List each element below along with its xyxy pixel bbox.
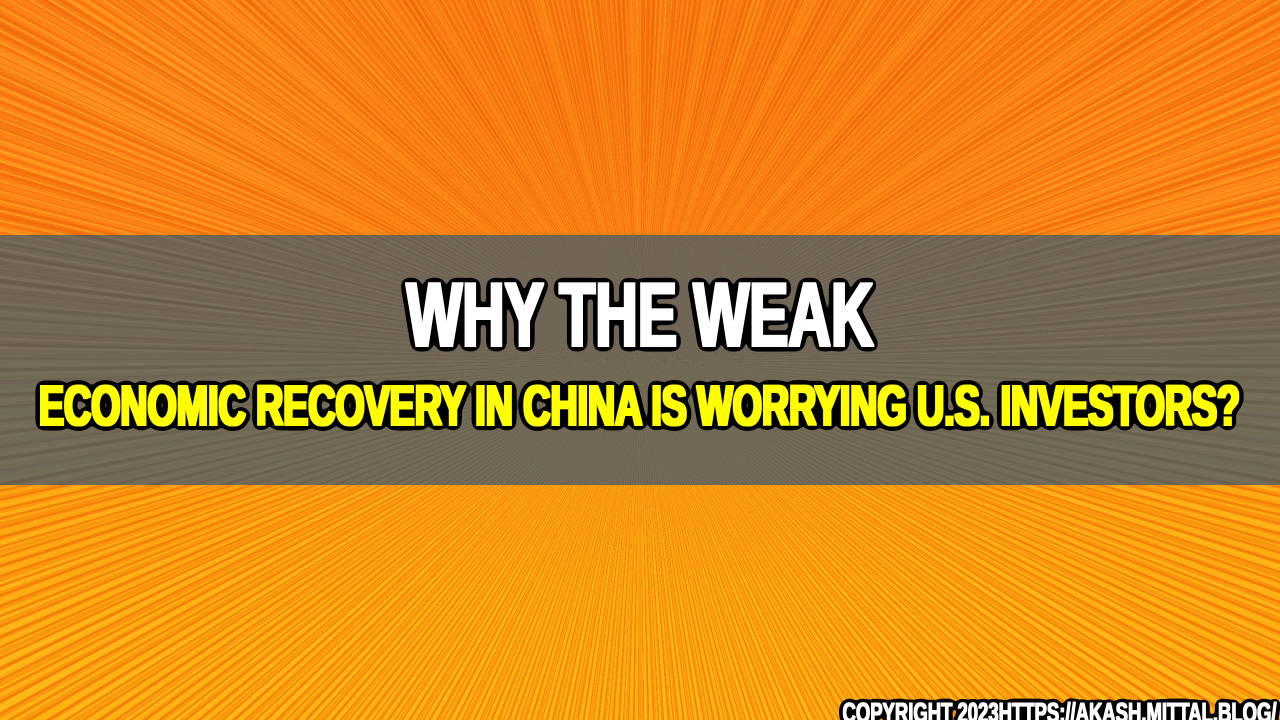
upper burst: deep orange streaks [0,0,1280,360]
translucent grey title band [0,235,1280,485]
heading: why the weak: WHY THE WEAK [406,265,874,366]
lower burst: amber streaks [0,360,1280,720]
